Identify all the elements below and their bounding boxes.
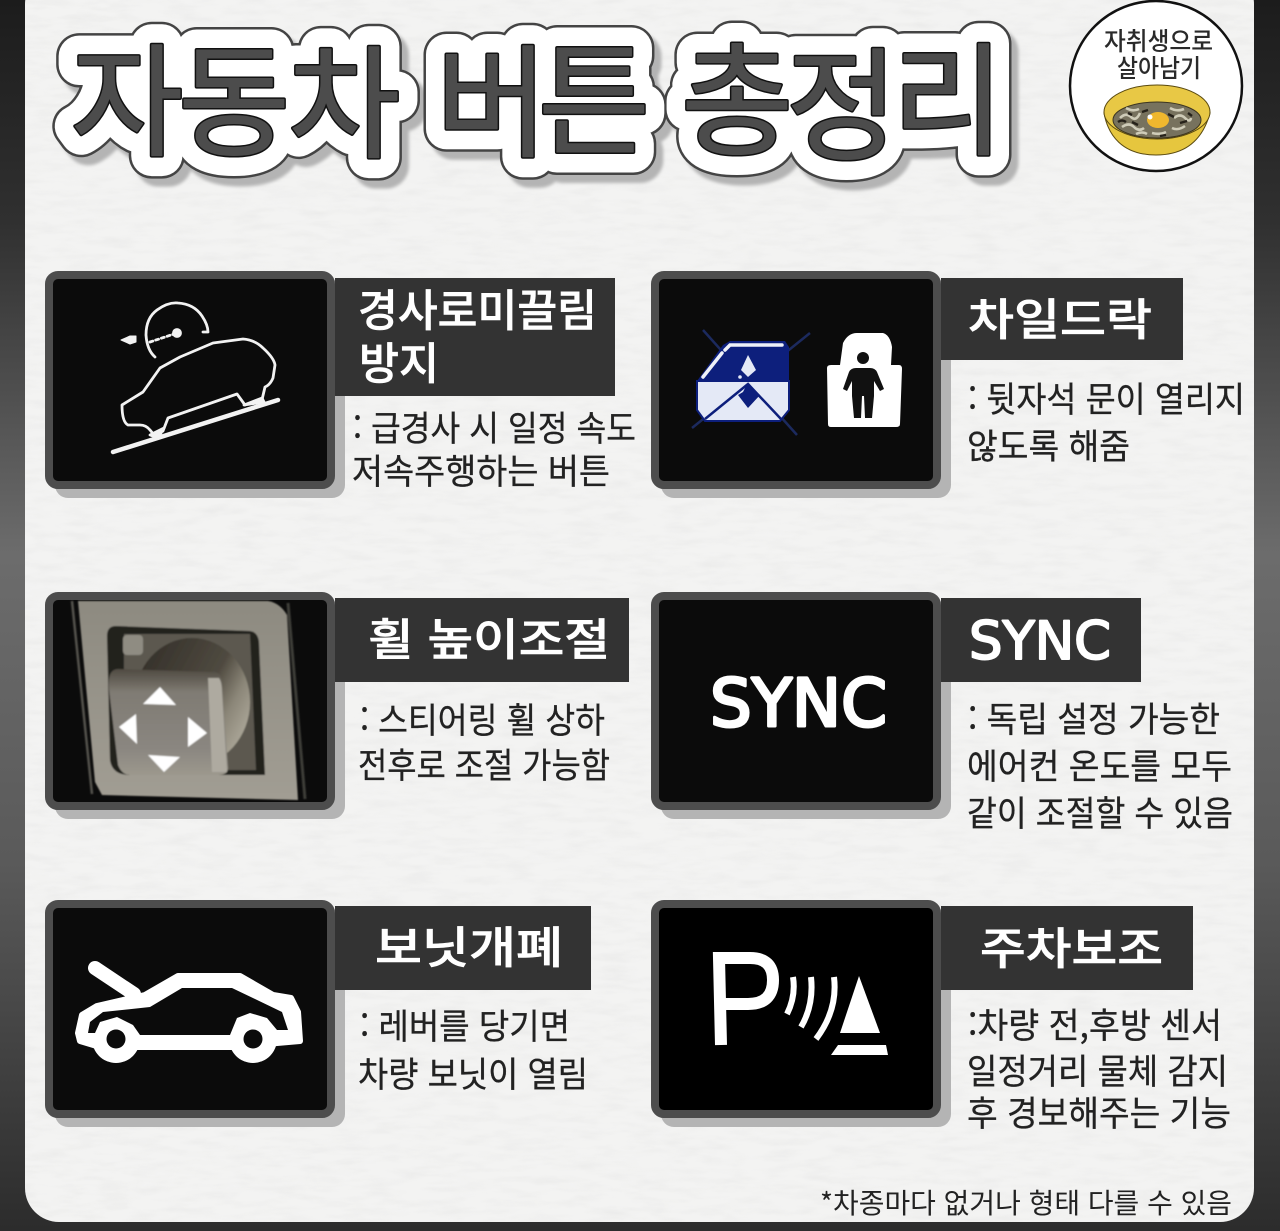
panel shadow [55, 601, 345, 819]
card: hill descent [49, 275, 636, 498]
panel shadow [55, 909, 345, 1127]
panel shadow [661, 280, 951, 498]
label: 휠 높이조절: 휠 높이조절 [368, 604, 610, 668]
title: 자동차 버튼 총정리 [71, 4, 1004, 186]
icon: car on slope with gauge [113, 303, 278, 452]
title: 자동차 버튼 총정리 [71, 4, 1004, 186]
description: 저속주행하는 버튼 [352, 444, 610, 495]
badge: 자취생으로 살아남기 [1070, 1, 1242, 171]
button frame [655, 904, 937, 1114]
description: : 레버를 당기면 [360, 999, 570, 1050]
label: 경사로미끌림 방지: 경사로미끌림 [358, 275, 597, 339]
label: 보닛개폐: 보닛개폐 [375, 912, 563, 976]
description [967, 692, 1233, 837]
panel shadow [661, 909, 951, 1127]
title: 자동차 버튼 총정리 [78, 12, 1011, 194]
badge: 자취생으로 살아남기: 살아남기 [1117, 49, 1201, 85]
card: child lock [655, 275, 1245, 498]
label: 차일드락 [941, 278, 1183, 360]
description: 같이 조절할 수 있음 [967, 786, 1233, 837]
description: 일정거리 물체 감지 [967, 1044, 1228, 1095]
description: : 급경사 시 일정 속도 [353, 401, 636, 452]
card: SYNC [655, 596, 1233, 837]
panel shadow [55, 280, 345, 498]
footnote: *차종마다 없거나 형태 다를 수 있음 [820, 1182, 1232, 1222]
description: 후 경보해주는 기능 [967, 1086, 1231, 1137]
icon: parking sensor [719, 958, 888, 1055]
button frame [655, 596, 937, 806]
description: 에어컨 온도를 모두 [967, 739, 1232, 790]
label: 주차보조 [941, 906, 1193, 990]
title: 자동차 버튼 총정리 [71, 4, 1004, 186]
photo: steering adjust switch [72, 601, 305, 800]
icon: ramen bowl [1104, 85, 1210, 155]
badge: 자취생으로 살아남기: 자취생으로 [1104, 22, 1213, 58]
description: 않도록 해줌 [967, 419, 1130, 470]
label: 휠 높이조절 [335, 598, 629, 682]
button frame [49, 275, 331, 485]
icon: door with cross [692, 330, 810, 435]
description [358, 999, 588, 1098]
button frame [655, 275, 937, 485]
button frame [49, 596, 331, 806]
label: SYNC: SYNC [969, 611, 1111, 672]
panel shadow [661, 601, 951, 819]
description: : 스티어링 휠 상하 [360, 693, 605, 744]
icon: car with open bonnet [78, 968, 300, 1063]
card: parking assist [655, 904, 1231, 1137]
icon: lock with person [827, 333, 902, 427]
icon: SYNC text: SYNC [710, 665, 887, 742]
description: : 뒷자석 문이 열리지 [968, 372, 1245, 423]
card: bonnet release [49, 904, 591, 1127]
label: 차일드락: 차일드락 [968, 284, 1152, 348]
label: 주차보조: 주차보조 [980, 913, 1163, 977]
label: 보닛개폐 [335, 906, 591, 990]
description: 차량 보닛이 열림 [358, 1047, 588, 1098]
description: 전후로 조절 가능함 [358, 738, 610, 789]
label: 경사로미끌림 방지: 방지 [359, 328, 439, 392]
description [352, 401, 636, 495]
label: 경사로미끌림 방지 [335, 275, 615, 396]
card: steering wheel height [49, 596, 629, 819]
description [358, 693, 610, 789]
description [967, 372, 1245, 470]
description: : 독립 설정 가능한 [968, 692, 1220, 743]
label: SYNC [941, 598, 1141, 682]
title: 자동차 버튼 총정리 [71, 4, 1004, 186]
button frame [49, 904, 331, 1114]
description: :차량 전,후방 센서 [968, 998, 1222, 1049]
description [967, 998, 1231, 1137]
